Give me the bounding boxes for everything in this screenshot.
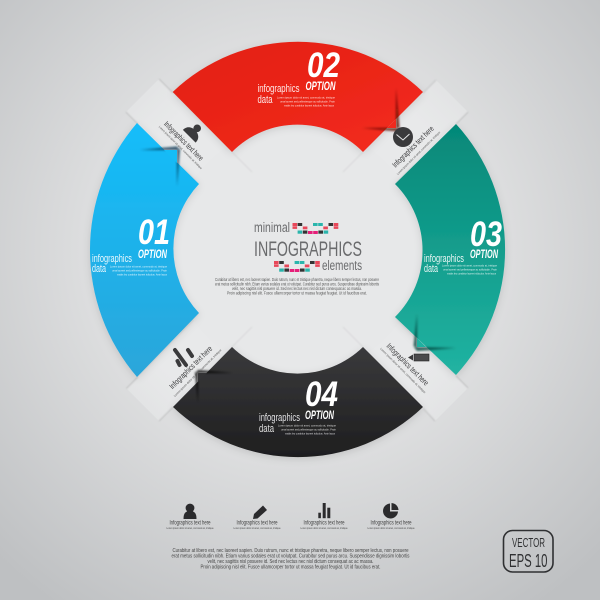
diagonal band: top-left to bottom-right: [126, 79, 468, 421]
option 03 text: [424, 215, 502, 276]
center paragraph: Curabitur at libero est, nec laoreet sapien. Duis rutrum, nunc et tristique pharetra, neque libero semper lectus, non posuere: [215, 277, 379, 282]
pixel strip upper: [292, 223, 338, 234]
option 01 text: mattis leo curabitur laoreet ridiculus. Ante lacus: [117, 272, 167, 276]
fold: teal corner: [414, 314, 456, 351]
segment 03 teal: [395, 124, 505, 375]
bottom item: pie chart: [368, 503, 415, 530]
center heading: INFOGRAPHICS: [254, 237, 362, 261]
option 04 text: urna laoreet sed pellentesque ac sollicitudin. Proin: [281, 428, 336, 432]
option 02 text: infographics: [258, 83, 300, 95]
option 01 text: infographics: [92, 253, 132, 265]
option 02 text: data: [258, 94, 273, 106]
bottom paragraph: erat metus sollicitudin nibh. Etiam varius sodales erat ut volutpat. Curabitur sed purus arcu. Suspendisse dignissim lobortis: [172, 554, 410, 560]
bottom item: bar chart: Infographics text here: [304, 520, 345, 526]
center paragraph: [215, 277, 379, 296]
bottom item: pie chart: Lorem ipsum dolor sit amet, commodo at, tristique: [368, 526, 415, 530]
option 01 text: data: [92, 263, 107, 275]
vector badge: [504, 530, 553, 572]
bottom item: pencil: [234, 506, 281, 530]
option 02 text: OPTION: [306, 81, 336, 93]
band label: top-right with clock icon: Lorem ipsum dolor sit amet, commodo at, tristique: [396, 130, 441, 176]
center paragraph: erat metus sollicitudin nibh. Etiam varius sodales erat ut volutpat. Curabitur sed purus arcu. Suspendisse dignissim lobortis: [215, 282, 379, 286]
option 03 text: OPTION: [470, 249, 498, 261]
segment 04 black: [173, 347, 423, 457]
bottom paragraph: [172, 548, 410, 570]
bottom item: pencil: Infographics text here: [236, 520, 278, 526]
bottom item: person: Lorem ipsum dolor sit amet, commodo at, tristique: [166, 526, 214, 530]
fold: black corner: [195, 370, 233, 403]
option 04 text: Lorem ipsum dolor sit amet, commodo at, tristique: [278, 424, 336, 428]
vector badge: EPS 10: [509, 551, 548, 571]
diagonal band: top-right to bottom-left: [126, 80, 468, 421]
option 01 text: 01: [138, 213, 170, 252]
option 04 text: infographics: [259, 412, 300, 424]
center heading: minimal: [254, 220, 290, 235]
option 03 text: urna laoreet sed pellentesque ac sollicitudin. Proin: [443, 268, 497, 272]
option 01 text: [92, 213, 170, 276]
option 01 text: Lorem ipsum dolor sit amet, commodo at, tristique: [110, 264, 167, 268]
band label: top-left with person icon: Infographics text here: [162, 120, 205, 163]
bottom item: pencil: Lorem ipsum dolor sit amet, commodo at, tristique: [234, 526, 281, 530]
option 04 text: OPTION: [305, 410, 334, 422]
bottom paragraph: velit, nec sagittis nisl posuere id. Sed nec lectus nec nisl dictum consequat ac ac massa.: [208, 559, 374, 565]
band label: top-right with clock icon: Infographics text here: [391, 124, 436, 169]
option 04 text: [259, 375, 338, 436]
option 01 text: urna laoreet sed pellentesque ac sollicitudin. Proin: [112, 268, 167, 272]
option 02 text: urna laoreet sed pellentesque ac sollicitudin. Proin: [280, 100, 335, 104]
segment 02 red: [173, 42, 423, 152]
option 04 text: 04: [305, 375, 338, 414]
center paragraph: Proin adipiscing nisl elit. Fusce ullamcorper tortor ut massa feugiat feugiat. Ut id faucibus erat.: [227, 290, 367, 296]
option 03 text: data: [424, 263, 439, 275]
bottom item: bar chart: Lorem ipsum dolor sit amet, commodo at, tristique: [300, 526, 348, 530]
band label: top-left with person icon: Lorem ipsum dolor sit amet, commodo at, tristique: [158, 125, 203, 170]
bottom item: person: Infographics text here: [170, 520, 211, 526]
option 04 text: data: [259, 423, 275, 435]
option 03 text: infographics: [424, 253, 464, 265]
center disc: [172, 125, 422, 375]
pixel strip lower: [274, 261, 320, 272]
option 02 text: [258, 46, 340, 108]
bottom item: bar chart: [300, 503, 348, 530]
option 01 text: OPTION: [138, 249, 167, 261]
option 02 text: mattis leo curabitur laoreet ridiculus. Ante lacus: [284, 104, 334, 108]
band label: bottom-left with bars icon: Lorem ipsum dolor sit amet, commodo at, tristique: [173, 348, 223, 398]
bottom paragraph: Proin adipiscing nisl elit. Fusce ullamcorper tortor ut massa feugiat feugiat. Ut id faucibus erat.: [200, 564, 380, 570]
option 03 text: Lorem ipsum dolor sit amet, commodo at, tristique: [442, 264, 497, 268]
option 02 text: Lorem ipsum dolor sit amet, commodo at, tristique: [277, 96, 335, 100]
option 04 text: mattis leo curabitur laoreet ridiculus. Ante lacus: [285, 432, 335, 436]
band label: bottom-right with pencil icon: Lorem ipsum dolor sit amet, commodo at, tristique: [379, 347, 427, 394]
band label: bottom-left with bars icon: Infographics text here: [168, 344, 215, 391]
bottom item: person: [166, 504, 214, 530]
band label: bottom-right with pencil icon: Infographics text here: [385, 342, 431, 388]
vector badge: VECTOR: [512, 536, 545, 550]
center heading: [254, 220, 362, 273]
option 03 text: 03: [470, 215, 502, 254]
segment 01 blue: [90, 123, 199, 377]
center heading: elements: [322, 258, 362, 273]
bottom paragraph: Curabitur at libero est, nec laoreet sapien. Duis rutrum, nunc et tristique pharetra, neque libero semper lectus, non posuere: [172, 548, 408, 554]
fold: blue corner: [140, 146, 180, 186]
bottom item: pie chart: Infographics text here: [370, 520, 412, 526]
center paragraph: velit, nec sagittis nisl posuere id. Sed nec lectus nec nisl dictum consequat ac ac massa.: [232, 286, 362, 291]
option 02 text: 02: [307, 46, 340, 85]
option 03 text: mattis leo curabitur laoreet ridiculus. Ante lacus: [447, 272, 496, 276]
fold: red corner: [362, 88, 400, 132]
